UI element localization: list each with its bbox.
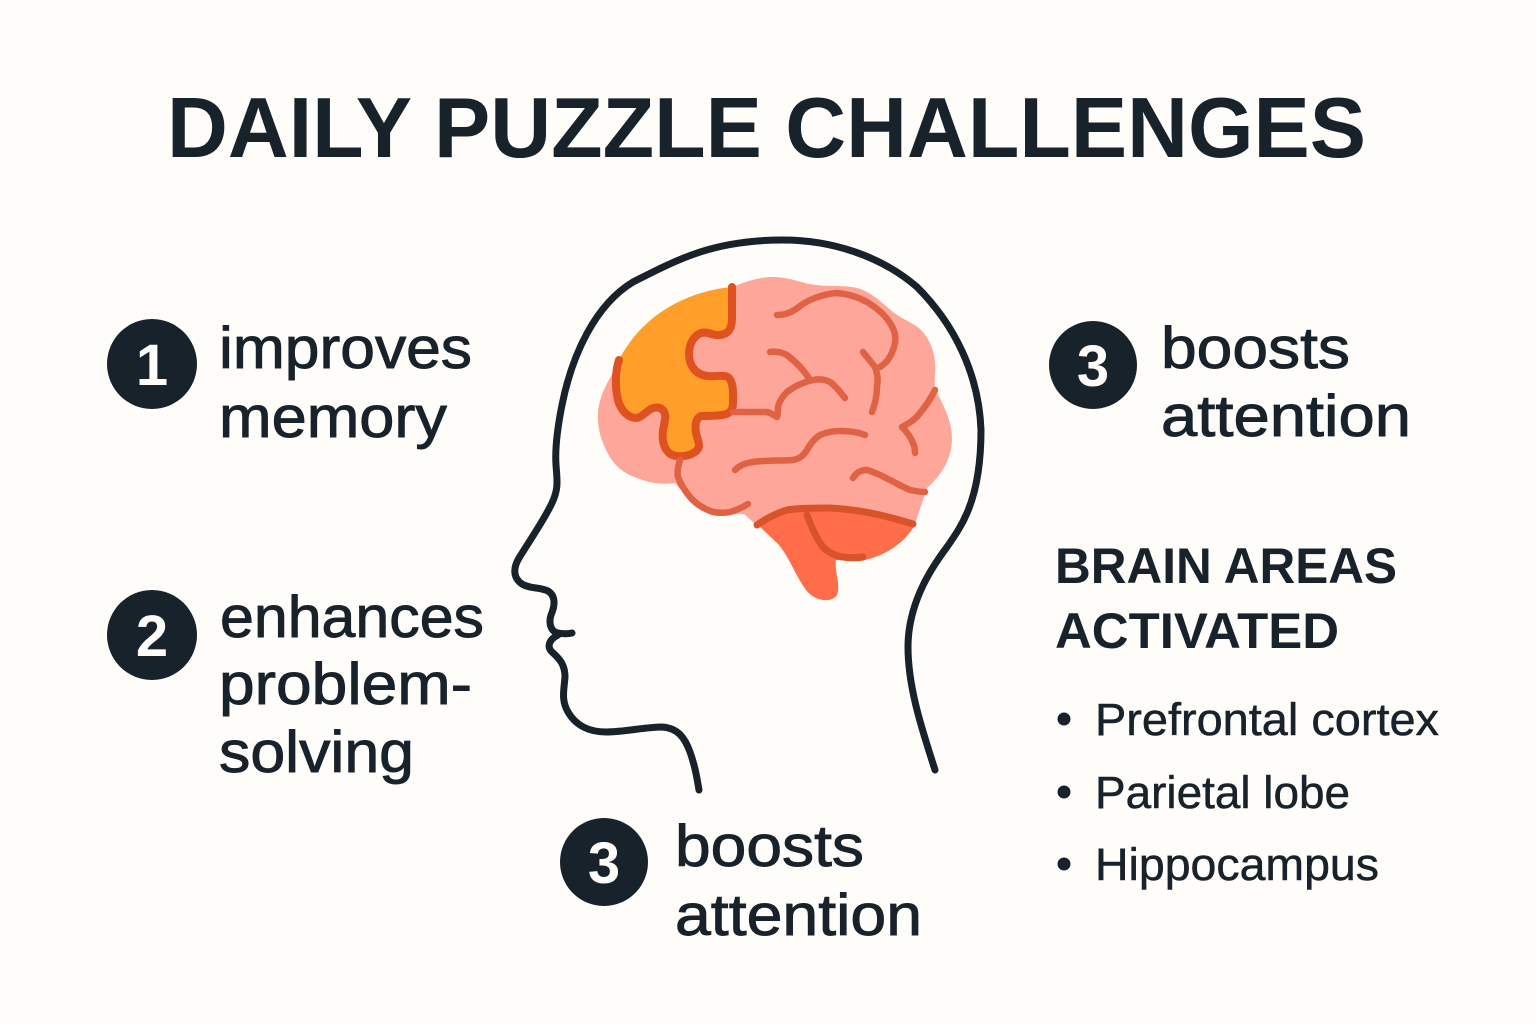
list item: hippocampus: Hippocampus <box>1095 839 1379 890</box>
badge: number 3 <box>1049 321 1137 409</box>
brain: folds <box>678 293 935 513</box>
label: improves memory: memory <box>219 385 447 450</box>
label: boosts attention: boosts <box>675 814 864 879</box>
title: DAILY PUZZLE CHALLENGES <box>167 81 1366 176</box>
label: boosts attention <box>675 814 922 948</box>
label: improves memory: improves <box>219 316 472 381</box>
label: boosts attention <box>1161 316 1411 449</box>
benefit 2: enhances problem-solving <box>107 585 484 785</box>
list item: prefrontal cortex: Prefrontal cortex <box>1095 694 1440 745</box>
brain <box>598 277 952 600</box>
badge: number 3: 3 <box>588 831 620 896</box>
brain: cerebellum and stem <box>757 508 915 600</box>
brain: highlighted puzzle piece <box>617 287 733 456</box>
heading <box>1055 538 1397 659</box>
label: enhances problem-solving: solving <box>219 720 414 785</box>
badge: number 2: 2 <box>136 604 168 669</box>
badge: number 3 <box>560 818 648 906</box>
benefit 3: boosts attention, bottom centre <box>560 814 922 948</box>
benefit 3: boosts attention, upper right <box>1049 316 1411 449</box>
list item: parietal lobe: Parietal lobe <box>1095 767 1350 818</box>
heading: ACTIVATED <box>1055 603 1339 659</box>
badge: number 1 <box>107 319 197 409</box>
badge: number 2 <box>107 590 197 680</box>
benefit 1: improves memory <box>107 316 472 450</box>
head outline <box>515 240 981 790</box>
label: enhances problem-solving: problem- <box>219 652 472 717</box>
heading: BRAIN AREAS <box>1055 538 1397 594</box>
badge: number 1: 1 <box>136 333 168 398</box>
badge: number 3: 3 <box>1077 334 1109 399</box>
brain: cerebrum <box>598 277 952 524</box>
brain: cerebellum folds <box>757 508 913 558</box>
label: boosts attention: boosts <box>1161 316 1350 381</box>
panel: brain areas activated <box>1055 538 1440 890</box>
label: enhances problem-solving <box>219 585 484 785</box>
brain: puzzle piece outline <box>616 287 733 456</box>
label: improves memory <box>219 316 472 450</box>
label: enhances problem-solving: enhances <box>220 585 484 650</box>
label: boosts attention: attention <box>1161 384 1411 449</box>
label: boosts attention: attention <box>675 883 922 948</box>
